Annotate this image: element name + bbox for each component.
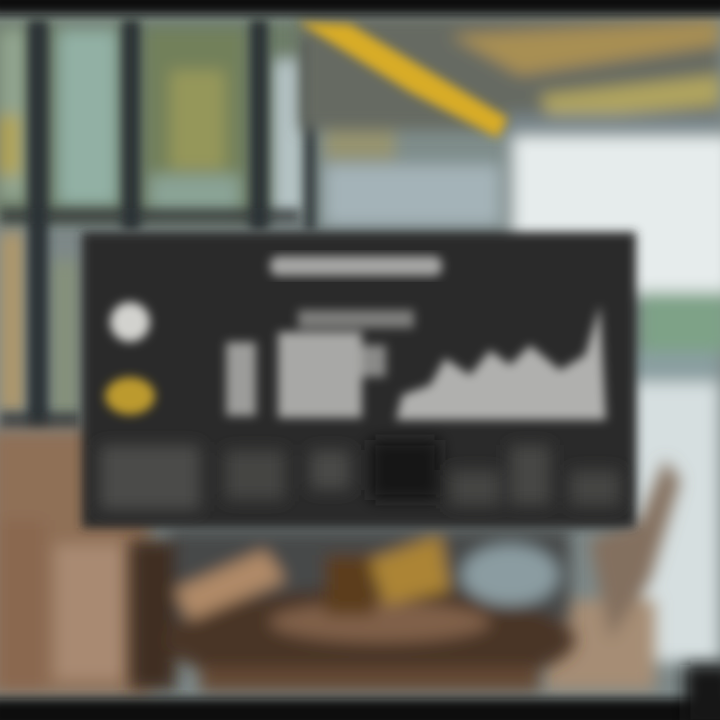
- window: bright right side with greenery: [512, 135, 720, 662]
- panel: dashboard display: [82, 232, 636, 528]
- border: dark top strip: [0, 0, 720, 14]
- beam: yellow ceiling beam: [298, 22, 508, 138]
- border: dark bottom strip: [0, 699, 720, 720]
- table: wooden table with objects: [130, 530, 575, 692]
- corner: dark bottom right: [685, 665, 720, 720]
- ceiling: beams at upper right: [300, 15, 720, 132]
- floor: wooden floor at left: [0, 430, 680, 695]
- icon: white circle: [110, 302, 150, 342]
- background: windows and foliage: [0, 20, 506, 420]
- icon: yellow circle: [105, 377, 155, 415]
- heading: blurred dashboard title: [270, 256, 442, 276]
- chart: blurred area chart: [226, 305, 606, 420]
- table rows: blurred data rows: [100, 440, 620, 510]
- mullions: dark window frames: [0, 20, 315, 430]
